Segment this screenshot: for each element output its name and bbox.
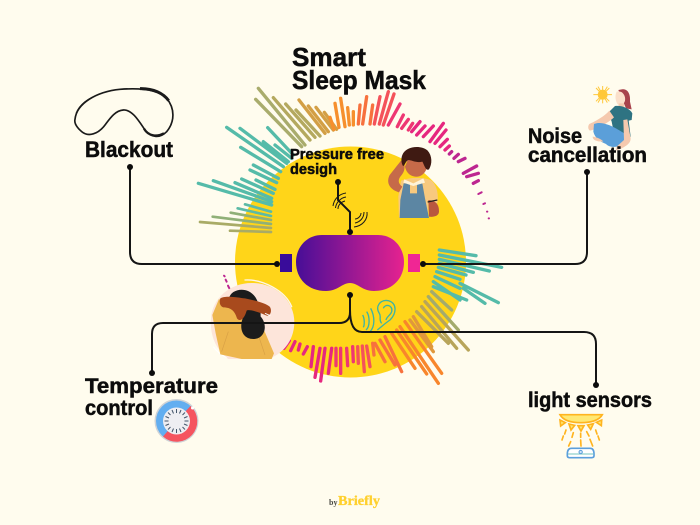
title: Sleep Mask	[292, 65, 426, 95]
connector lines	[130, 167, 596, 385]
icon: blackout mask outline	[75, 89, 173, 136]
label: noise cancellation: Noise	[528, 125, 582, 148]
mask straps	[280, 254, 420, 272]
icon: light sensor with sun rays	[560, 415, 602, 458]
icon: thermostat dial	[154, 399, 198, 443]
label: light sensors: light sensors	[528, 389, 652, 412]
label: temperature control: control	[85, 397, 153, 420]
brand credit: Briefly	[338, 494, 380, 509]
connector: pressure free design	[338, 182, 350, 232]
label: noise cancellation	[528, 125, 647, 167]
label: temperature control	[85, 375, 218, 420]
title: Smart	[292, 42, 366, 72]
connector: light sensors	[350, 310, 596, 385]
label: pressure free design: Pressure free	[290, 146, 384, 163]
illustration: sitting woman with sun	[588, 86, 632, 151]
sleep mask	[296, 235, 404, 291]
label: blackout: Blackout	[85, 137, 174, 162]
sound waves near top connector	[333, 193, 367, 227]
connector: blackout	[130, 167, 277, 264]
connector dots	[127, 164, 599, 388]
upper radial sound bars	[198, 88, 489, 232]
label: pressure free design: desigh	[290, 161, 337, 178]
ear icon	[363, 301, 395, 332]
label: temperature control: Temperature	[85, 375, 218, 398]
label: pressure free design	[290, 146, 384, 178]
lower radial sound bars	[282, 250, 502, 383]
label: noise cancellation: cancellation	[528, 144, 647, 167]
connector: noise cancellation	[423, 172, 587, 264]
woman with arm over head illustration	[211, 280, 294, 359]
connector: temperature control	[152, 295, 350, 372]
pink dashes above woman illustration	[224, 276, 229, 288]
illustration: child touching head	[388, 147, 439, 218]
yellow circle	[235, 146, 466, 378]
title	[292, 42, 426, 95]
brand credit: by	[329, 498, 337, 507]
